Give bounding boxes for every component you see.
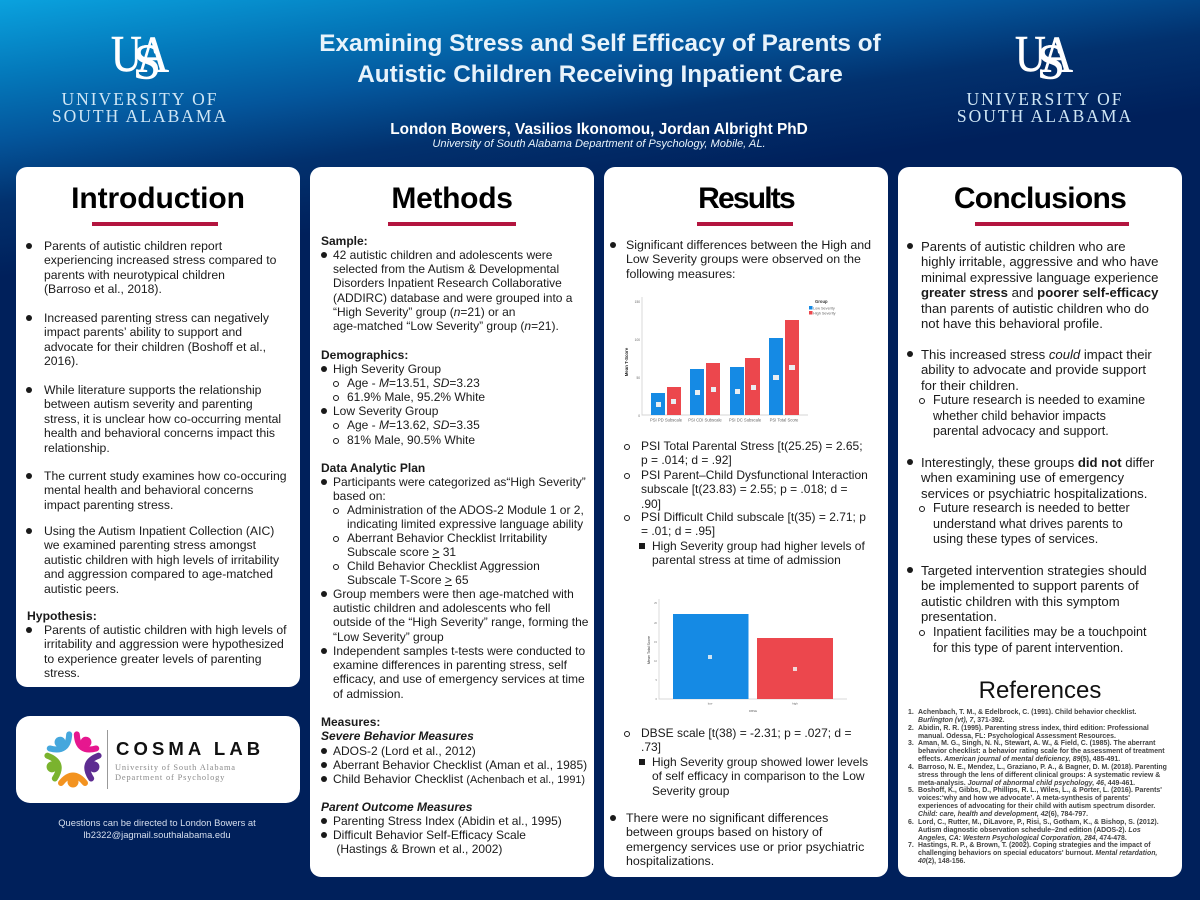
panel: cosma lab logo	[16, 716, 300, 803]
text: criterion ABC: Aberrant Behavior Checklist Irritability	[347, 531, 547, 545]
text: PSI total	[641, 439, 863, 468]
text: intro point 2: Increased parenting stress can negatively	[44, 311, 269, 325]
bar chart: PSI subscales by group: High Severity	[813, 312, 836, 316]
heading: results: Results	[698, 182, 794, 215]
bar chart: PSI subscales by group: 0	[638, 414, 640, 418]
heading underline	[92, 222, 218, 226]
reference list: Burlington (vt), 7, 371-392.	[918, 717, 1005, 724]
text: intro point 5: we examined parenting stress amongst	[44, 538, 256, 552]
heading: measures: Measures:	[321, 715, 380, 729]
text: inpatient touchpoint	[933, 625, 1147, 656]
reference list: behavior checklist: a behavior rating scale for the assessment of treatment	[918, 748, 1165, 755]
text: conclusion 1: greater stress and poorer self-efficacy	[921, 285, 1158, 300]
text: sample description: selected from the Autism & Developmental	[333, 262, 559, 276]
icon: five coloured figures	[44, 731, 102, 788]
icon: USA monogram: S	[1037, 33, 1065, 89]
reference list: Barroso, N. E., Mendez, L., Graziano, P. A., & Bagner, D. M. (2018). Parenting	[918, 764, 1167, 771]
authors: London Bowers, Vasilios Ikonomou, Jordan Albright PhD	[390, 121, 808, 138]
text: intro point 1: parents with neurotypical children	[44, 268, 225, 282]
text: future research on advocacy	[933, 393, 1145, 440]
text: PSI difficult child: = .01; d = .95]	[641, 524, 715, 538]
reference list: Aman, M. G., Singh, N. N., Stewart, A. W., & Field, C. (1985). The aberrant	[918, 740, 1155, 747]
title	[319, 30, 881, 88]
text: intro point 2: 2016).	[44, 354, 79, 368]
heading: introduction: Introduction	[71, 182, 245, 215]
title: Autistic Children Receiving Inpatient Care	[357, 61, 843, 88]
reference list: stress through the lens of different clinical groups: A systematic review &	[918, 772, 1160, 779]
text: intro point 4: The current study examines how co-occuring	[44, 469, 287, 483]
text: analysis: of admission.	[333, 687, 404, 701]
text: PSI: Parenting Stress Index (Abidin et al., 1995)	[333, 814, 562, 828]
text: criterion CBCL: Subscale T-Score > 65	[347, 573, 469, 587]
text: PSI parent child: subscale [t(23.83) = 2.55; p = .018; d =	[641, 482, 847, 496]
reference list: Autism diagnostic observation schedule–2nd edition (ADOS-2). Los	[918, 827, 1141, 834]
bar chart: PSI subscales by group: 50	[636, 376, 640, 380]
panel: results	[604, 167, 888, 877]
bar chart: DBSE by group: 25	[654, 601, 658, 605]
text: intro point 5: autistic peers.	[44, 582, 119, 596]
text: PSI parent child: PSI Parent–Child Dysfunctional Interaction	[641, 468, 868, 482]
bar chart: PSI subscales by group: PSI DC Subscale	[729, 418, 762, 422]
text: sample description	[333, 248, 572, 333]
text: intro point 4: impact parenting stress.	[44, 498, 173, 512]
text: CBCL: Child Behavior Checklist (Achenbach et al., 1991)	[333, 772, 585, 786]
bar chart: PSI subscales by group: 150	[635, 300, 640, 304]
text: conclusion 3	[921, 455, 1154, 501]
icon: USA monogram	[1015, 26, 1073, 89]
text: intro point 3: health and behavioral concerns impact this	[44, 426, 275, 440]
text: analysis: efficacy, and use of emergency services at time	[333, 672, 585, 686]
text: significant differences: following measures:	[626, 267, 736, 281]
logo wordmark: SOUTH ALABAMA	[957, 106, 1133, 126]
text: low severity group: Low Severity Group	[333, 404, 438, 418]
bar chart: DBSE by group: low	[708, 702, 713, 706]
bar chart: PSI subscales by group: PSI CDI Subscale	[688, 418, 722, 422]
reference list: 2.	[908, 725, 914, 732]
title: Examining Stress and Self Efficacy of Parents of	[319, 30, 881, 57]
logo wordmark: SOUTH ALABAMA	[52, 106, 228, 126]
header: left university logo	[52, 26, 228, 126]
text: sample description: 42 autistic children and adolescents were	[333, 248, 552, 262]
text: future research on service use: understand what drives parents to	[933, 516, 1123, 530]
text: no differences	[626, 811, 864, 869]
affiliation: University of South Alabama Department of Psychology, Mobile, AL.	[432, 138, 766, 150]
logo divider	[107, 730, 108, 789]
text: DBSE: Difficult Behavior Self-Efficacy Scale	[333, 828, 526, 842]
text: sample description: age-matched “Low Severity” group (n=21).	[333, 319, 559, 333]
heading: demographics: Demographics:	[321, 348, 408, 362]
text: conclusion 4: autistic children with this symptom	[921, 594, 1120, 609]
reference list: 7.	[908, 842, 914, 849]
text: high severity stats: Age - M=13.51, SD=3.23	[347, 376, 480, 390]
logo wordmark	[52, 89, 228, 126]
text: conclusion 1: not have this behavioral profile.	[921, 316, 1103, 331]
text: conclusion 1	[921, 239, 1158, 331]
text: no differences: between groups based on history of	[626, 825, 822, 839]
text: higher stress finding: High Severity group had higher levels of	[652, 539, 865, 553]
text: matching: outside of the “High Severity” range, forming the	[333, 615, 588, 629]
text: hypothesis statement: to experience greater levels of parenting	[44, 652, 261, 666]
bar chart: DBSE by group: 0	[656, 697, 658, 701]
text: PSI difficult child: PSI Difficult Child subscale [t(35) = 2.71; p	[641, 510, 866, 524]
text: lower self efficacy finding: High Severity group showed lower levels	[652, 755, 868, 769]
icon: USA monogram: A	[1041, 27, 1073, 84]
text: no differences: hospitalizations.	[626, 854, 714, 868]
bar chart: DBSE by group: 5	[656, 678, 658, 682]
subheading: severe behavior measures: Severe Behavior Measures	[321, 729, 474, 743]
text: matching	[333, 587, 588, 644]
text: intro point 5	[44, 524, 279, 596]
text: intro point 3: relationship.	[44, 441, 110, 455]
text: hypothesis statement: stress.	[44, 666, 80, 680]
heading underline	[388, 222, 516, 226]
header: right university logo	[957, 26, 1133, 126]
panel: conclusions	[898, 167, 1182, 877]
bar chart: DBSE by group: 15	[654, 640, 658, 644]
text: conclusion 3: Interestingly, these groups did not differ	[921, 455, 1154, 470]
text: conclusion 3: services or psychiatric hospitalizations.	[921, 486, 1147, 501]
text: future research on advocacy: Future research is needed to examine	[933, 393, 1145, 407]
text: matching: Group members were then age-matched with	[333, 587, 574, 601]
reference list: Abidin, R. R. (1995). Parenting stress index, third edition: Professional	[918, 725, 1149, 732]
bar chart: PSI subscales by group: Mean T-Score	[624, 347, 629, 376]
text: conclusion 4: presentation.	[921, 609, 997, 624]
text: no differences: There were no significant differences	[626, 811, 828, 825]
heading: sample: Sample:	[321, 234, 368, 248]
text: conclusion 1: highly irritable, aggressive and who have	[921, 254, 1158, 269]
logo wordmark: UNIVERSITY OF	[61, 89, 219, 109]
text: intro point 3: While literature supports the relationship	[44, 383, 261, 397]
reference list: effects. American journal of mental deficiency, 89(5), 485-491.	[918, 756, 1120, 763]
text: intro point 2: impact parents’ ability to support and	[44, 325, 242, 339]
reference list: Achenbach, T. M., & Edelbrock, C. (1991). Child behavior checklist.	[918, 709, 1136, 716]
text: criterion CBCL: Child Behavior Checklist Aggression	[347, 559, 540, 573]
heading underline	[697, 222, 793, 226]
text: high severity group: High Severity Group	[333, 362, 441, 376]
panel: introduction	[16, 167, 300, 687]
text: low severity stats: Age - M=13.62, SD=3.35	[347, 418, 480, 432]
panel: methods	[310, 167, 594, 877]
text: lower self efficacy finding: of self efficacy in comparison to the Low	[652, 769, 865, 783]
text: DBSE scale: DBSE scale [t(38) = -2.31; p = .027; d =	[641, 726, 851, 740]
text: future research on advocacy: whether child behavior impacts	[933, 408, 1106, 422]
contact note: Questions can be directed to London Bowers at	[58, 817, 256, 828]
text: intro point 5: autistic children with high levels of irritability	[44, 553, 279, 567]
text: future research on service use	[933, 501, 1130, 548]
text: conclusion 2	[921, 347, 1152, 393]
icon: USA monogram: S	[133, 33, 161, 89]
icon: USA monogram: U	[1015, 26, 1046, 83]
text: DBSE	[333, 828, 526, 856]
reference list: 5.	[908, 787, 914, 794]
text: analysis	[333, 644, 585, 701]
text: DBSE: (Hastings & Brown et al., 2002)	[336, 842, 502, 856]
lab affiliation: Department of Psychology	[115, 773, 225, 782]
text: DBSE scale: .73]	[641, 740, 661, 754]
text: sample description: Disorders Inpatient Research Collaborative	[333, 276, 562, 290]
logo wordmark: UNIVERSITY OF	[966, 89, 1124, 109]
heading: methods: Methods	[391, 182, 513, 215]
text: conclusion 3: when examining use of emergency	[921, 470, 1124, 485]
text: high severity criteria intro: Participants were categorized as“High Severity”	[333, 475, 586, 489]
heading: hypothesis: Hypothesis:	[27, 609, 97, 623]
text: criterion ABC	[347, 531, 547, 559]
reference list: experiences of advocating for their child with autism spectrum disorder.	[918, 803, 1155, 810]
text: inpatient touchpoint: for this type of parent intervention.	[933, 640, 1123, 654]
text: DBSE scale	[641, 726, 851, 755]
text: PSI parent child	[641, 468, 868, 511]
text: lower self efficacy finding: Severity group	[652, 784, 729, 798]
reference list: 1.	[908, 709, 914, 716]
bar chart: DBSE by group: 10	[654, 659, 658, 663]
reference list: 3.	[908, 740, 914, 747]
text: conclusion 2: ability to advocate and provide support	[921, 362, 1146, 377]
reference list: meta-analysis. Journal of abnormal child psychology, 46, 449-461.	[918, 780, 1135, 787]
heading: references: References	[979, 677, 1101, 704]
logo wordmark	[957, 89, 1133, 126]
reference list: manual. Odessa, FL: Psychological Assessment Resources.	[918, 733, 1116, 740]
reference list: 4.	[908, 764, 914, 771]
text: intro point 4	[44, 469, 287, 512]
text: criterion ADOS: indicating limited expressive language ability	[347, 517, 583, 531]
heading: conclusions: Conclusions	[954, 182, 1126, 215]
subheading: parent outcome measures: Parent Outcome Measures	[321, 800, 472, 814]
reference list: 6.	[908, 819, 914, 826]
text: PSI difficult child	[641, 510, 866, 539]
text: future research on advocacy: parental advocacy and support.	[933, 424, 1109, 438]
text: matching: autistic children and adolescents who fell	[333, 601, 550, 615]
bar chart: DBSE by group: 20	[654, 621, 658, 625]
text: intro point 5: and aggression compared to age-matched	[44, 567, 273, 581]
bar chart: PSI subscales by group	[624, 297, 836, 422]
heading: data analytic plan: Data Analytic Plan	[321, 461, 425, 475]
text: hypothesis statement: irritability and aggression were hypothesized	[44, 637, 284, 651]
text: intro point 3: stress, it is unclear how co-occurring mental	[44, 412, 281, 426]
text: sample description: “High Severity” group (n=21) or an	[333, 305, 515, 319]
text: hypothesis statement	[44, 623, 287, 681]
text: criterion ABC: Subscale score > 31	[347, 545, 456, 559]
text: intro point 4: mental health and behavioral concerns	[44, 483, 253, 497]
icon: USA monogram: A	[137, 27, 169, 84]
text: ADOS: ADOS-2 (Lord et al., 2012)	[333, 744, 476, 758]
text: intro point 3	[44, 383, 281, 455]
text: conclusion 4: be implemented to support parents of	[921, 578, 1139, 593]
text: intro point 5: Using the Autism Inpatient Collection (AIC)	[44, 524, 274, 538]
text: analysis: Independent samples t-tests were conducted to	[333, 644, 585, 658]
text: conclusion 2: for their children.	[921, 378, 1019, 393]
reference list: challenging behaviors on special educators' burnout. Mental retardation,	[918, 850, 1157, 857]
text: high severity sex and race: 61.9% Male, 95.2% White	[347, 390, 485, 404]
lab affiliation	[115, 763, 236, 782]
text: hypothesis statement: Parents of autistic children with high levels of	[44, 623, 287, 637]
text: intro point 3: between autism severity and parenting	[44, 397, 253, 411]
text: conclusion 4: Targeted intervention strategies should	[921, 563, 1147, 578]
text: matching: “Low Severity” group	[333, 630, 444, 644]
text: conclusion 4	[921, 563, 1147, 625]
bar chart: DBSE by group: DBSE	[749, 709, 757, 713]
reference list	[908, 708, 1167, 865]
text: conclusion 1: than parents of autistic children who do	[921, 301, 1149, 316]
text: lower self efficacy finding	[652, 755, 868, 798]
text: intro point 2: advocate for their children (Boshoff et al.,	[44, 340, 266, 354]
lab affiliation: University of South Alabama	[115, 763, 236, 772]
text: high severity criteria intro: based on:	[333, 489, 386, 503]
bar chart: PSI subscales by group: 100	[635, 338, 640, 342]
text: future research on service use: Future research is needed to better	[933, 501, 1130, 515]
text: intro point 1: experiencing increased stress compared to	[44, 253, 276, 267]
bar chart: PSI subscales by group: Group	[815, 299, 828, 304]
bar chart: DBSE by group: Mean Total Score	[647, 636, 651, 664]
text: significant differences: Significant differences between the High and	[626, 238, 871, 252]
text: significant differences	[626, 238, 871, 281]
reference list: Boshoff, K., Gibbs, D., Phillips, R. L., Wiles, L., & Porter, L. (2016). Parents'	[918, 787, 1162, 794]
text: criterion ADOS	[347, 503, 584, 531]
text: no differences: emergency services use or prior psychiatric	[626, 840, 864, 854]
reference list: Lord, C., Rutter, M., DiLavore, P., Risi, S., Gotham, K., & Bishop, S. (2012).	[918, 819, 1159, 826]
text: future research on service use: using these types of services.	[933, 532, 1098, 546]
text: PSI total: p = .014; d = .92]	[641, 453, 732, 467]
bar chart: DBSE by group	[647, 599, 847, 713]
text: intro point 1	[44, 239, 276, 297]
text: higher stress finding	[652, 539, 865, 568]
text: ABC: Aberrant Behavior Checklist (Aman et al., 1985)	[333, 758, 587, 772]
text: intro point 1: Parents of autistic children report	[44, 239, 222, 253]
reference list: voices:‘why and how we advocate’. A meta-synthesis of parents'	[918, 795, 1130, 802]
bar chart: PSI subscales by group: PSI PD Subscale	[650, 418, 683, 422]
reference list: Angeles, CA: Western Psychological Corporation, 284, 474-478.	[918, 834, 1127, 842]
lab name: COSMA LAB	[116, 738, 264, 759]
text: criterion CBCL	[347, 559, 540, 587]
contact note: lb2322@jagmail.southalabama.edu	[83, 829, 231, 840]
heading underline	[975, 222, 1129, 226]
text: intro point 1: (Barroso et al., 2018).	[44, 282, 162, 296]
text: sample description: (ADDIRC) database and were grouped into a	[333, 291, 572, 305]
bar chart: DBSE by group: high	[792, 702, 798, 706]
text: high severity criteria intro	[333, 475, 586, 503]
bar chart: PSI subscales by group: Low Severity	[813, 306, 835, 310]
reference list: Hastings, R. P., & Brown, T. (2002). Coping strategies and the impact of	[918, 842, 1151, 849]
icon: USA monogram: U	[111, 26, 142, 83]
icon: USA monogram	[111, 26, 169, 89]
text: PSI parent child: .90]	[641, 497, 661, 511]
bar chart: PSI subscales by group: PSI Total Score	[770, 418, 799, 422]
text: significant differences: Low Severity groups were observed on the	[626, 252, 861, 266]
contact note	[58, 817, 256, 840]
text: criterion ADOS: Administration of the ADOS-2 Module 1 or 2,	[347, 503, 584, 517]
reference list: 40(2), 148-156.	[918, 858, 965, 865]
text: intro point 2	[44, 311, 269, 369]
text: higher stress finding: parental stress at time of admission	[652, 553, 841, 567]
text: analysis: examine differences in parenting stress, self	[333, 658, 567, 672]
text: conclusion 2: This increased stress could impact their	[921, 347, 1152, 362]
text: PSI total: PSI Total Parental Stress [t(25.25) = 2.65;	[641, 439, 863, 453]
reference list: Child: care, health and development, 42(6), 784-797.	[918, 811, 1088, 818]
text: conclusion 1: Parents of autistic children who are	[921, 239, 1126, 254]
text: inpatient touchpoint: Inpatient facilities may be a touchpoint	[933, 625, 1147, 639]
text: low severity sex and race: 81% Male, 90.5% White	[347, 433, 475, 447]
text: conclusion 1: minimal expressive language experience	[921, 270, 1158, 285]
